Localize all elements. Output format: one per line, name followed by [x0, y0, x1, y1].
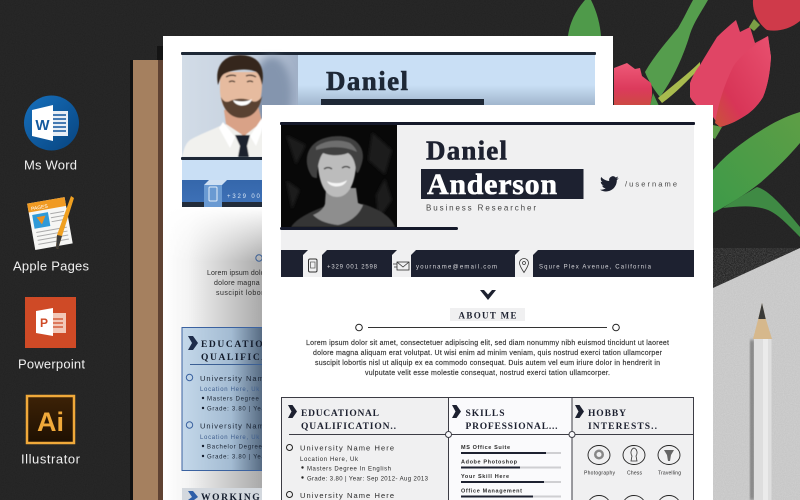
hobby icons: second row	[588, 496, 680, 500]
app: illustrator: Illustrator	[21, 452, 81, 466]
panel: three-column sections	[282, 398, 694, 500]
about me paragraph: Lorem ipsum dolor sit amet, consectetuer adipiscing elit, sed diam nonummy nibh euismod tincidunt ut laoreet	[306, 340, 669, 347]
back page education panel: University Name Here	[200, 422, 293, 430]
sidebar: software list	[13, 96, 90, 466]
contact: phone: +329 001 2598	[327, 264, 378, 270]
tulip: top right	[753, 0, 800, 31]
back page photo: man in white shirt	[182, 55, 298, 157]
about me paragraph	[306, 340, 669, 377]
front page photo baseline bar	[280, 227, 458, 230]
section: educational qualification: Grade: 3.80 | Year: Sep 2012- Aug 2013	[307, 476, 429, 482]
app: ms word: W	[35, 117, 50, 134]
leaf: top left	[568, 0, 601, 36]
heading: about me: ABOUT ME	[458, 310, 516, 320]
back page about text	[207, 255, 268, 297]
icon: pencil	[750, 303, 772, 500]
contact: phone	[303, 250, 378, 277]
section: educational qualification: University Name Here	[300, 491, 394, 500]
leaf: tall centre	[645, 0, 708, 97]
tulip: large	[690, 20, 771, 127]
icon: chess: Chess	[627, 470, 642, 476]
back page about text: dolore magna a	[214, 280, 266, 287]
app: powerpoint: P	[40, 316, 48, 330]
contact strip	[281, 250, 694, 277]
panel: front resume page	[262, 105, 713, 500]
job title: Business Researcher	[426, 204, 536, 212]
skill bar: your skill: Your Skill Here	[461, 474, 509, 480]
section: skills: SKILLS	[466, 409, 504, 419]
skill bar: office management: Office Management	[461, 488, 522, 494]
front page header panel	[281, 125, 694, 250]
contact: email: yourname@email.com	[416, 264, 497, 270]
section: educational qualification: University Name Here	[300, 444, 394, 452]
icon: travelling: Travelling	[658, 470, 681, 476]
front page photo: smiling young man	[281, 125, 397, 227]
front page top bar	[280, 122, 695, 125]
icon: photography: Photography	[584, 470, 616, 476]
app: ms word	[24, 96, 79, 172]
section: skills	[452, 405, 561, 498]
back page education panel: Location Here, Uk	[200, 435, 260, 441]
heading: about me	[450, 308, 525, 321]
section: educational qualification: Location Here, Uk	[300, 457, 359, 463]
contact: address: Squre Plex Avenue, California	[539, 264, 652, 270]
back page working section	[182, 488, 272, 500]
panel: brown folder behind resumes	[130, 46, 164, 500]
back page education panel: Location Here, Uk	[200, 387, 260, 393]
leaf: large right	[713, 112, 800, 213]
skill bar: photoshop: Adobe Photoshop	[461, 460, 518, 466]
back page about text: suscipit lobort	[216, 290, 266, 297]
app: apple pages: PAGES	[31, 204, 49, 212]
section: educational qualification	[286, 405, 429, 500]
back page top bar	[181, 52, 596, 55]
app: illustrator	[21, 396, 81, 466]
name: Daniel: Daniel	[426, 136, 507, 166]
contact: address	[515, 250, 652, 277]
illustration: tulips and leaves	[568, 0, 800, 237]
app: illustrator: Ai	[37, 407, 64, 437]
section: skills: PROFESSIONAL...	[466, 422, 558, 432]
stem: centre	[658, 62, 700, 103]
section: hobby interests: HOBBY	[588, 409, 626, 419]
back page education panel: Grade: 3.80 | Year	[207, 406, 268, 412]
skill bar: ms office: MS Office Suite	[461, 445, 510, 451]
section: educational qualification: QUALIFICATION..	[301, 422, 396, 432]
icon: twitter bird	[600, 176, 619, 191]
back page education panel: QUALIFICATION	[201, 353, 300, 363]
section: hobby interests: INTERESTS..	[588, 422, 657, 432]
back page education panel: EDUCATIONAL	[201, 340, 289, 350]
back page education panel: Masters Degree In	[207, 396, 268, 402]
back page education panel	[182, 328, 300, 470]
back page education panel: Grade: 3.80 | Year	[207, 454, 268, 460]
section: educational qualification: Masters Degree In English	[307, 466, 391, 472]
back page education panel: Bachelor Degree	[207, 444, 263, 450]
app: powerpoint	[18, 297, 85, 372]
name: Anderson: Anderson	[427, 168, 557, 201]
back page photo baseline bar	[181, 157, 271, 160]
about me paragraph: vulputate velit esse molestie consequat, nostrud exerci tation ullamcorper.	[365, 370, 610, 377]
app: apple pages: Apple Pages	[13, 258, 90, 274]
back page header background	[182, 55, 595, 180]
grey concrete corner	[713, 248, 800, 500]
app: ms word: Ms Word	[24, 158, 77, 172]
twitter username: /username	[625, 180, 677, 188]
app: powerpoint: Powerpoint	[18, 356, 85, 372]
tulip: small	[614, 63, 652, 106]
section: educational qualification: EDUCATIONAL	[301, 409, 379, 419]
back page contact strip: +329 001	[227, 194, 266, 200]
about me paragraph: suscipit lobortis nisl ut aliquip ex ea commodo consequat. Duis autem vel eum iriure dolor in hendrerit in	[315, 360, 660, 367]
contact: email	[392, 250, 497, 277]
icon: down chevron	[480, 290, 496, 300]
back page about text: Lorem ipsum dolor	[207, 270, 268, 277]
back page education panel: University Name Here	[200, 374, 293, 383]
section: hobby interests	[575, 405, 681, 500]
leaf: lower right	[723, 187, 800, 237]
about me paragraph: dolore magna aliquam erat volutpat. Ut wisi enim ad minim veniam, quis nostrud exerci tation ullamcorper	[313, 350, 663, 357]
panel: back resume page	[163, 36, 613, 500]
leaf: small stub	[650, 93, 659, 106]
back page name: Daniel	[326, 66, 408, 96]
stem: big tulip	[713, 125, 722, 139]
app: apple pages	[13, 196, 90, 274]
about divider with circles	[356, 324, 619, 331]
back page contact strip	[182, 180, 272, 207]
